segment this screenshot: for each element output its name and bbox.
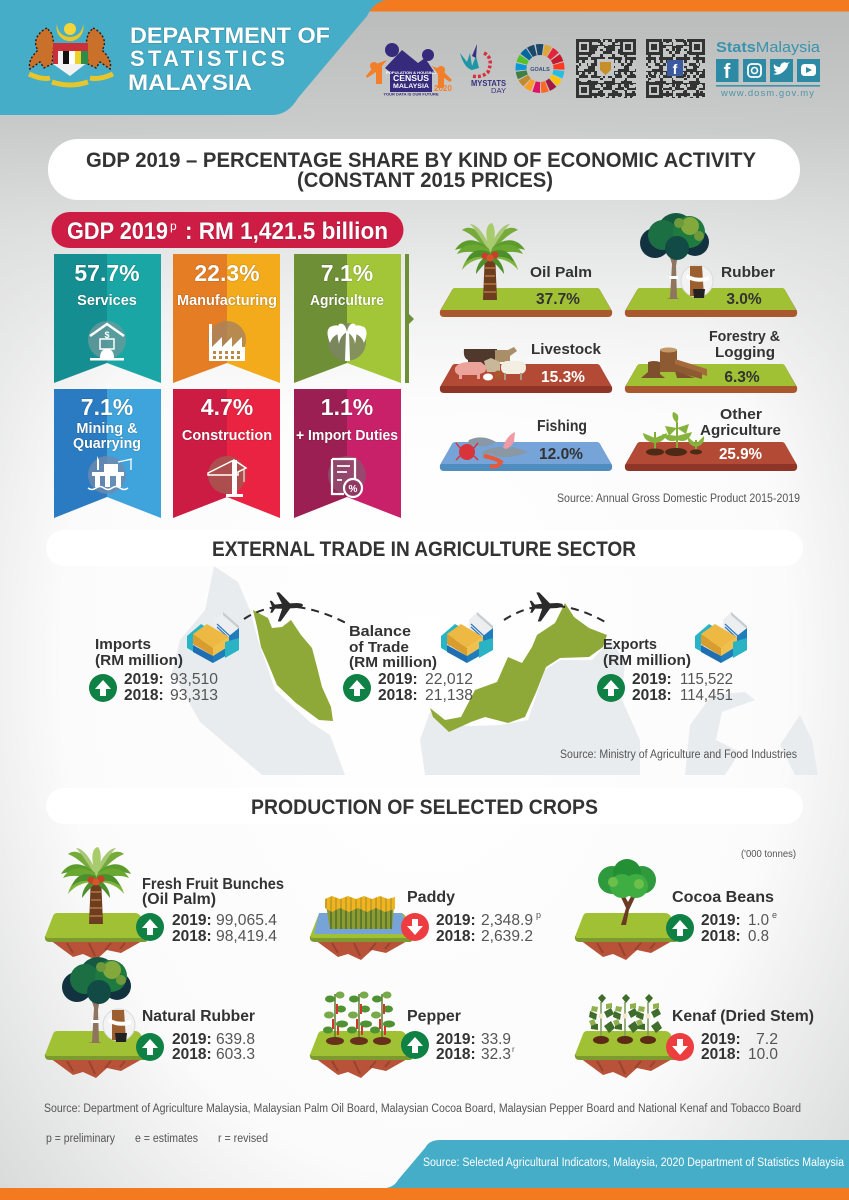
crop: fresh fruit bunches: (Oil Palm) [142, 891, 216, 908]
balance of trade block: Balance [349, 623, 411, 640]
icon: increase arrow [401, 1031, 429, 1059]
icon: airplane two [529, 591, 564, 622]
panel: mining ribbon [54, 389, 161, 518]
icon: floating island with paddy [310, 896, 414, 960]
panel: agriculture ribbon: 7.1% [321, 260, 373, 286]
crop: paddy: 2019: [436, 912, 476, 929]
fishing item [440, 418, 612, 471]
panel: construction ribbon: 4.7% [201, 394, 253, 420]
icon: floating island with cocoa tree [575, 859, 679, 960]
section heading: external trade: EXTERNAL TRADE IN AGRICULTURE SECTOR [212, 538, 636, 561]
icon: tower crane [208, 456, 246, 497]
livestock item: 15.3% [541, 369, 585, 386]
exports block: (RM million) [603, 652, 691, 669]
rubber item: 3.0% [726, 291, 762, 308]
imports block: 2018: [124, 687, 164, 704]
footer banner [0, 1140, 849, 1200]
icon: increase arrow [597, 674, 625, 702]
panel: services ribbon: 57.7% [74, 260, 140, 286]
panel: import duties ribbon [294, 389, 401, 518]
icon: QR code Facebook [646, 39, 705, 98]
icon: seedlings [643, 412, 704, 456]
heading: department name [128, 23, 330, 95]
icon: twitter [770, 59, 793, 82]
icon: increase arrow [666, 914, 694, 942]
title pill [48, 139, 800, 200]
crop: kenaf: 2019: [701, 1031, 741, 1048]
oil palm item [440, 223, 612, 317]
icon: containers [695, 612, 747, 663]
crop: fresh fruit bunches: 2018: [172, 928, 212, 945]
icon: containers [187, 612, 239, 663]
crop: fresh fruit bunches: Fresh Fruit Bunches [142, 876, 284, 893]
logo: census 2020: MALAYSIA [393, 83, 429, 90]
map: regional background [172, 566, 818, 775]
crop: cocoa beans: Cocoa Beans [672, 889, 774, 906]
crop: pepper: 2019: [436, 1031, 476, 1048]
crop: paddy [310, 889, 541, 960]
icon: containers [441, 612, 493, 663]
GDP total pill [52, 212, 404, 248]
exports block: Exports [603, 636, 657, 653]
icon: oil rig [88, 456, 132, 494]
other agriculture item [625, 406, 797, 471]
teal header shape [0, 0, 386, 115]
imports block: 93,510 [170, 671, 218, 688]
crop: pepper: Pepper [407, 1008, 461, 1025]
exports block [597, 612, 747, 704]
legend: data status notes: e = estimates [135, 1133, 198, 1145]
legend: data status notes: r = revised [218, 1133, 268, 1145]
heading: department name: MALAYSIA [128, 70, 252, 95]
crop: pepper [310, 992, 515, 1078]
crop: kenaf: 10.0 [748, 1046, 778, 1063]
crop: kenaf: 2018: [701, 1046, 741, 1063]
teal footer shape [386, 1140, 849, 1188]
logo: mystats day: DAY [491, 86, 506, 95]
balance of trade block [343, 612, 493, 704]
crop: cocoa beans: e [772, 910, 777, 920]
icon: floating island with pepper plants [310, 992, 414, 1078]
panel: construction ribbon: Construction [182, 428, 272, 444]
icon: floating island with oil palm [45, 847, 149, 960]
logo: mystats day [460, 44, 506, 95]
panel: import duties ribbon: + Import Duties [296, 428, 398, 444]
imports block: Imports [95, 636, 151, 653]
logo: census 2020 [366, 43, 452, 96]
rubber item: Rubber [721, 264, 775, 281]
panel: agriculture ribbon: Agriculture [310, 293, 384, 309]
icon: floating island with rubber tree [45, 957, 149, 1078]
icon: palm tree [328, 323, 366, 361]
logo: sustainable development goals wheel [513, 42, 567, 95]
crop: paddy: 2,348.9 [481, 912, 533, 929]
panel: agriculture breakdown [440, 213, 800, 505]
icon: QR code Malaysia crest [576, 39, 636, 98]
balance of trade block: 2019: [378, 671, 418, 688]
fishing item: Fishing [537, 418, 587, 435]
icon: decrease arrow [666, 1033, 694, 1061]
logo: census 2020: 2020 [434, 84, 452, 93]
crop: natural rubber: Natural Rubber [142, 1008, 255, 1025]
panel: services ribbon [54, 254, 161, 383]
orange bottom bar [0, 1188, 849, 1200]
balance of trade block: 22,012 [425, 671, 473, 688]
icon: tree stumps and logs [641, 348, 707, 379]
crop: pepper: 2018: [436, 1046, 476, 1063]
crop: fresh fruit bunches [45, 847, 284, 960]
icon: coat of arms [29, 23, 113, 85]
legend: data status notes [46, 1133, 268, 1145]
forestry and logging item [625, 328, 797, 393]
icon: factory [208, 321, 246, 361]
crop: kenaf: 7.2 [756, 1031, 778, 1048]
logo: census 2020: YOUR DATA IS OUR FUTURE [383, 92, 439, 96]
map: Sabah and Sarawak [430, 603, 607, 732]
heading: department name: DEPARTMENT OF [130, 23, 330, 48]
crop: pepper: 33.9 [481, 1031, 511, 1048]
exports block: 2019: [632, 671, 672, 688]
logo: sustainable development goals wheel: GOALS [530, 67, 550, 73]
logo: census 2020: CENSUS [393, 74, 430, 83]
crop: pepper: 32.3 [481, 1046, 511, 1063]
icon: increase arrow [343, 674, 371, 702]
legend: data status notes: p = preliminary [46, 1133, 115, 1145]
icon: increase arrow [89, 674, 117, 702]
rubber item [625, 213, 797, 317]
orange top bar [370, 0, 849, 12]
forestry and logging item: Logging [715, 344, 775, 361]
section heading: production of crops [46, 788, 803, 824]
crop: cocoa beans: 1.0 [748, 912, 769, 929]
crop: paddy: 2,639.2 [481, 928, 533, 945]
title pill: GDP 2019 – PERCENTAGE SHARE BY KIND OF ECONOMIC ACTIVITY [86, 148, 756, 172]
exports block: 2018: [632, 687, 672, 704]
icon: QR code Facebook: f [673, 61, 678, 77]
forestry and logging item: 6.3% [724, 369, 760, 386]
icon: document with percent: % [349, 484, 358, 495]
logo: mystats day: MYSTATS [471, 78, 506, 88]
arrow: dashed flight path to peninsular Malaysia [244, 606, 346, 623]
heading: department name: STATISTICS [130, 46, 285, 71]
crop: cocoa beans: 2019: [701, 912, 741, 929]
map: peninsular Malaysia [253, 610, 333, 721]
forestry and logging item: Forestry & [709, 328, 780, 345]
exports block: 115,522 [680, 671, 733, 688]
GDP total pill: GDP 2019 [67, 218, 168, 245]
oil palm item: 37.7% [536, 291, 580, 308]
icon: increase arrow [136, 913, 164, 941]
icon: farm animals [455, 347, 526, 380]
crop: pepper: r [512, 1045, 515, 1054]
title pill: (CONSTANT 2015 PRICES) [297, 168, 553, 192]
panel: construction ribbon [173, 389, 280, 518]
crop: natural rubber [45, 957, 255, 1078]
other agriculture item: Other [720, 406, 762, 423]
imports block: (RM million) [95, 652, 183, 669]
icon: fish and seafood [456, 432, 528, 466]
source note: trade: Source: Ministry of Agriculture and Food Industries [560, 749, 797, 761]
fishing item: 12.0% [539, 446, 583, 463]
panel: services ribbon: Services [77, 293, 137, 309]
icon: youtube [797, 59, 820, 82]
panel: manufacturing ribbon [173, 254, 280, 383]
website address: www.dosm.gov.my [720, 88, 814, 99]
icon: facebook: f [724, 61, 731, 83]
panel: agriculture ribbon [294, 254, 401, 383]
crop: natural rubber: 2018: [172, 1046, 212, 1063]
crop: kenaf [575, 994, 814, 1078]
logo: census 2020: POPULATION & HOUSING [386, 70, 436, 75]
source note: crops: Source: Department of Agriculture Malaysia, Malaysian Palm Oil Board, Malaysian Cocoa Board, Malaysian Pepper Board and National Kenaf and Tobacco Board [44, 1103, 801, 1115]
panel: mining ribbon: Mining & [76, 421, 138, 437]
crop: paddy: p [536, 910, 541, 920]
livestock item: Livestock [531, 341, 602, 358]
crop: natural rubber: 639.8 [216, 1031, 255, 1048]
crop: paddy: Paddy [407, 889, 455, 906]
imports block [89, 612, 239, 704]
GDP total pill: p [170, 219, 177, 233]
oil palm item: Oil Palm [530, 264, 592, 281]
GDP total pill: : RM 1,421.5 billion [185, 218, 388, 245]
social media block [716, 39, 821, 99]
icon: decrease arrow [401, 913, 429, 941]
unit note: ('000 tonnes) [741, 849, 796, 860]
livestock item [440, 341, 612, 393]
StatsMalaysia wordmark: StatsMalaysia [716, 39, 821, 56]
imports block: 93,313 [170, 687, 218, 704]
panel: manufacturing ribbon: 22.3% [194, 260, 260, 286]
other agriculture item: Agriculture [700, 422, 781, 439]
crop: fresh fruit bunches: 2019: [172, 912, 212, 929]
crop: cocoa beans: 0.8 [748, 928, 769, 945]
section heading: production of crops: PRODUCTION OF SELECTED CROPS [251, 796, 598, 819]
arrow: dashed flight path to Borneo [504, 606, 607, 623]
crop: paddy: 2018: [436, 928, 476, 945]
crop: fresh fruit bunches: 98,419.4 [216, 928, 277, 945]
icon: floating island with kenaf plants [575, 994, 679, 1078]
header banner [0, 0, 849, 115]
balance of trade block: of Trade [349, 639, 409, 656]
icon: instagram [743, 59, 766, 82]
crop: cocoa beans [575, 859, 777, 960]
crop: natural rubber: 2019: [172, 1031, 212, 1048]
icon: increase arrow [136, 1033, 164, 1061]
section heading: external trade [46, 530, 803, 566]
exports block: 114,451 [680, 687, 733, 704]
panel: mining ribbon: 7.1% [81, 394, 133, 420]
panel: crops [45, 847, 814, 1078]
panel: external trade [89, 566, 818, 775]
balance of trade block: 21,138 [425, 687, 473, 704]
crop: cocoa beans: 2018: [701, 928, 741, 945]
icon: airplane one [269, 591, 304, 622]
icon: house with money and person: $ [104, 330, 110, 340]
crop: natural rubber: 603.3 [216, 1046, 255, 1063]
bracket: agriculture breakdown connector [405, 254, 414, 383]
balance of trade block: 2018: [378, 687, 418, 704]
panel: import duties ribbon: 1.1% [321, 394, 373, 420]
other agriculture item: 25.9% [719, 446, 762, 463]
panel: mining ribbon: Quarrying [73, 436, 141, 452]
imports block: 2019: [124, 671, 164, 688]
balance of trade block: (RM million) [349, 654, 437, 671]
source note: GDP: Source: Annual Gross Domestic Product 2015-2019 [557, 493, 800, 505]
panel: manufacturing ribbon: Manufacturing [177, 293, 277, 309]
crop: kenaf: Kenaf (Dried Stem) [672, 1008, 814, 1025]
crop: fresh fruit bunches: 99,065.4 [216, 912, 277, 929]
